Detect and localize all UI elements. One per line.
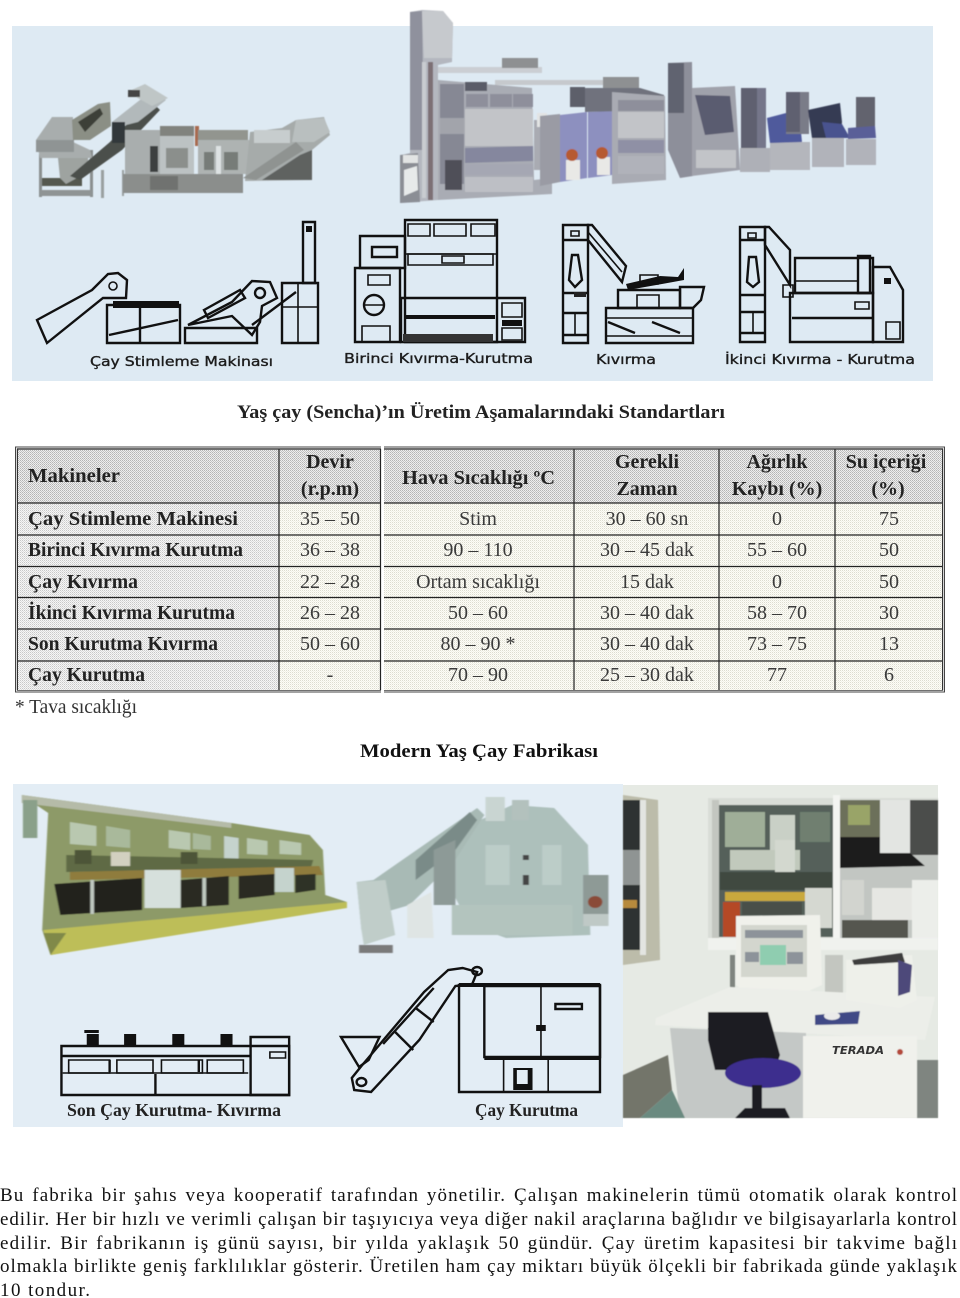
table row 4: [28, 600, 899, 624]
table: production standards: [16, 446, 944, 693]
table row 1: 75: [879, 508, 899, 530]
label: Birinci Kıvırma-Kurutma: Birinci Kıvırma-Kurutma: [344, 352, 533, 367]
table row 2: Birinci Kıvırma Kurutma: [28, 539, 243, 561]
table row 2: 30 – 45 dak: [600, 539, 694, 561]
label: Çay Stimleme Makinası: Çay Stimleme Makinası: [90, 355, 273, 370]
drawing: rolling machine: [563, 225, 704, 343]
table row 3: 50: [879, 571, 899, 593]
table row 5: [28, 633, 899, 655]
panel: modern factory machines: [13, 784, 623, 1127]
table row 5: 80 – 90 *: [440, 633, 516, 655]
table header row: (%): [871, 478, 905, 500]
table header row: [28, 451, 927, 500]
table row 3: 0: [772, 571, 782, 593]
panel: production line machines: [12, 10, 933, 381]
table row 3: 15 dak: [620, 571, 674, 593]
heading: modern tea factory: Modern Yaş Çay Fabrikası: [360, 741, 598, 762]
table row 3: 22 – 28: [300, 571, 360, 593]
table row 4: 58 – 70: [747, 602, 807, 624]
heading: table title: Yaş çay (Sencha)’ın Üretim Aşamalarındaki Standartları: [237, 402, 725, 423]
table row 1: 35 – 50: [300, 508, 360, 530]
drawing: first rolling and drying: [355, 220, 525, 342]
table row 6: -: [327, 664, 333, 686]
table row 5: 13: [879, 633, 899, 655]
drawing: tea steaming machine: [37, 222, 318, 343]
text block: factory description: edilir. Her bir hızlı ve verimli çalışan bir taşıyıcıya veya diğer nakil araçlarına bağlıdır ve bilgisayarlarla kontrol: [0, 1209, 957, 1230]
table row 4: 26 – 28: [300, 602, 360, 624]
drawing: second rolling and drying: [740, 227, 903, 342]
table row 6: Çay Kurutma: [28, 664, 145, 686]
table row 2: 50: [879, 539, 899, 561]
table row 5: 30 – 40 dak: [600, 633, 694, 655]
table row 4: 30 – 40 dak: [600, 602, 694, 624]
table row 6: [28, 664, 894, 686]
footnote: pan temperature: * Tava sıcaklığı: [15, 696, 137, 718]
table row 1: Çay Stimleme Makinesi: [28, 508, 238, 530]
photo: tea steaming machine: [36, 84, 330, 198]
table header row: Gerekli: [615, 451, 679, 473]
table row 2: [28, 539, 899, 561]
table row 6: 77: [767, 664, 787, 686]
table row 3: Ortam sıcaklığı: [416, 571, 540, 593]
table row 1: Stim: [459, 508, 497, 530]
table header row: Kaybı (%): [732, 478, 822, 500]
table row 4: 30: [879, 602, 899, 624]
table header row: Devir: [306, 451, 354, 473]
table header row: Su içeriği: [846, 451, 927, 473]
table row 3: [28, 571, 899, 593]
table row 3: Çay Kıvırma: [28, 571, 138, 593]
table row 4: 50 – 60: [448, 602, 508, 624]
table header row: (r.p.m): [301, 478, 359, 500]
label: Çay Kurutma: Çay Kurutma: [475, 1100, 578, 1120]
photo: green final drying machine: [22, 795, 347, 955]
text block: factory description: olmakla birlikte geniş farklılıklar gösterir. Üretilen ham çay miktarı büyük ölçekli bir fabrikada günde yaklaşık: [0, 1256, 957, 1277]
table row 6: 6: [884, 664, 894, 686]
text block: factory description: Bu fabrika bir şahıs veya kooperatif tarafından yönetilir. Çalışan makinelerin tümü otomatik olarak kontrol: [0, 1185, 957, 1206]
table header row: Zaman: [616, 478, 678, 500]
table row 6: 25 – 30 dak: [600, 664, 694, 686]
table row 1: 30 – 60 sn: [606, 508, 688, 530]
table row 6: 70 – 90: [448, 664, 508, 686]
label: TERADA brand on desk: TERADA: [832, 1044, 884, 1057]
label: Kıvırma: Kıvırma: [596, 353, 656, 368]
photo: teal drying machine: [357, 797, 608, 953]
table row 2: 90 – 110: [443, 539, 513, 561]
label: Son Çay Kurutma- Kıvırma: Son Çay Kurutma- Kıvırma: [67, 1100, 281, 1120]
photo: rolling and drying line: [400, 10, 876, 203]
text block: factory description: edilir. Bir fabrikanın iş günü sayısı, bir yılda yaklaşık 50 gündür. Çay üretim kapasitesi bir takvime bağlı: [0, 1233, 957, 1254]
label: İkinci Kıvırma - Kurutma: İkinci Kıvırma - Kurutma: [725, 352, 915, 368]
table row 5: Son Kurutma Kıvırma: [28, 633, 218, 655]
drawing: final drying and rolling machine: [61, 1030, 289, 1095]
table row 5: 73 – 75: [747, 633, 807, 655]
table row 2: 55 – 60: [747, 539, 807, 561]
drawing: tea dryer: [341, 967, 600, 1092]
table header row: Makineler: [28, 465, 120, 487]
photo: control room: [623, 785, 938, 1118]
table row 4: İkinci Kıvırma Kurutma: [28, 600, 235, 624]
table row 1: 0: [772, 508, 782, 530]
table row 5: 50 – 60: [300, 633, 360, 655]
table row 2: 36 – 38: [300, 539, 360, 561]
table header row: Ağırlık: [746, 451, 808, 473]
table header row: Hava Sıcaklığı ºC: [402, 467, 555, 489]
text block: factory description: [0, 1185, 957, 1298]
table row 1: [28, 508, 899, 530]
